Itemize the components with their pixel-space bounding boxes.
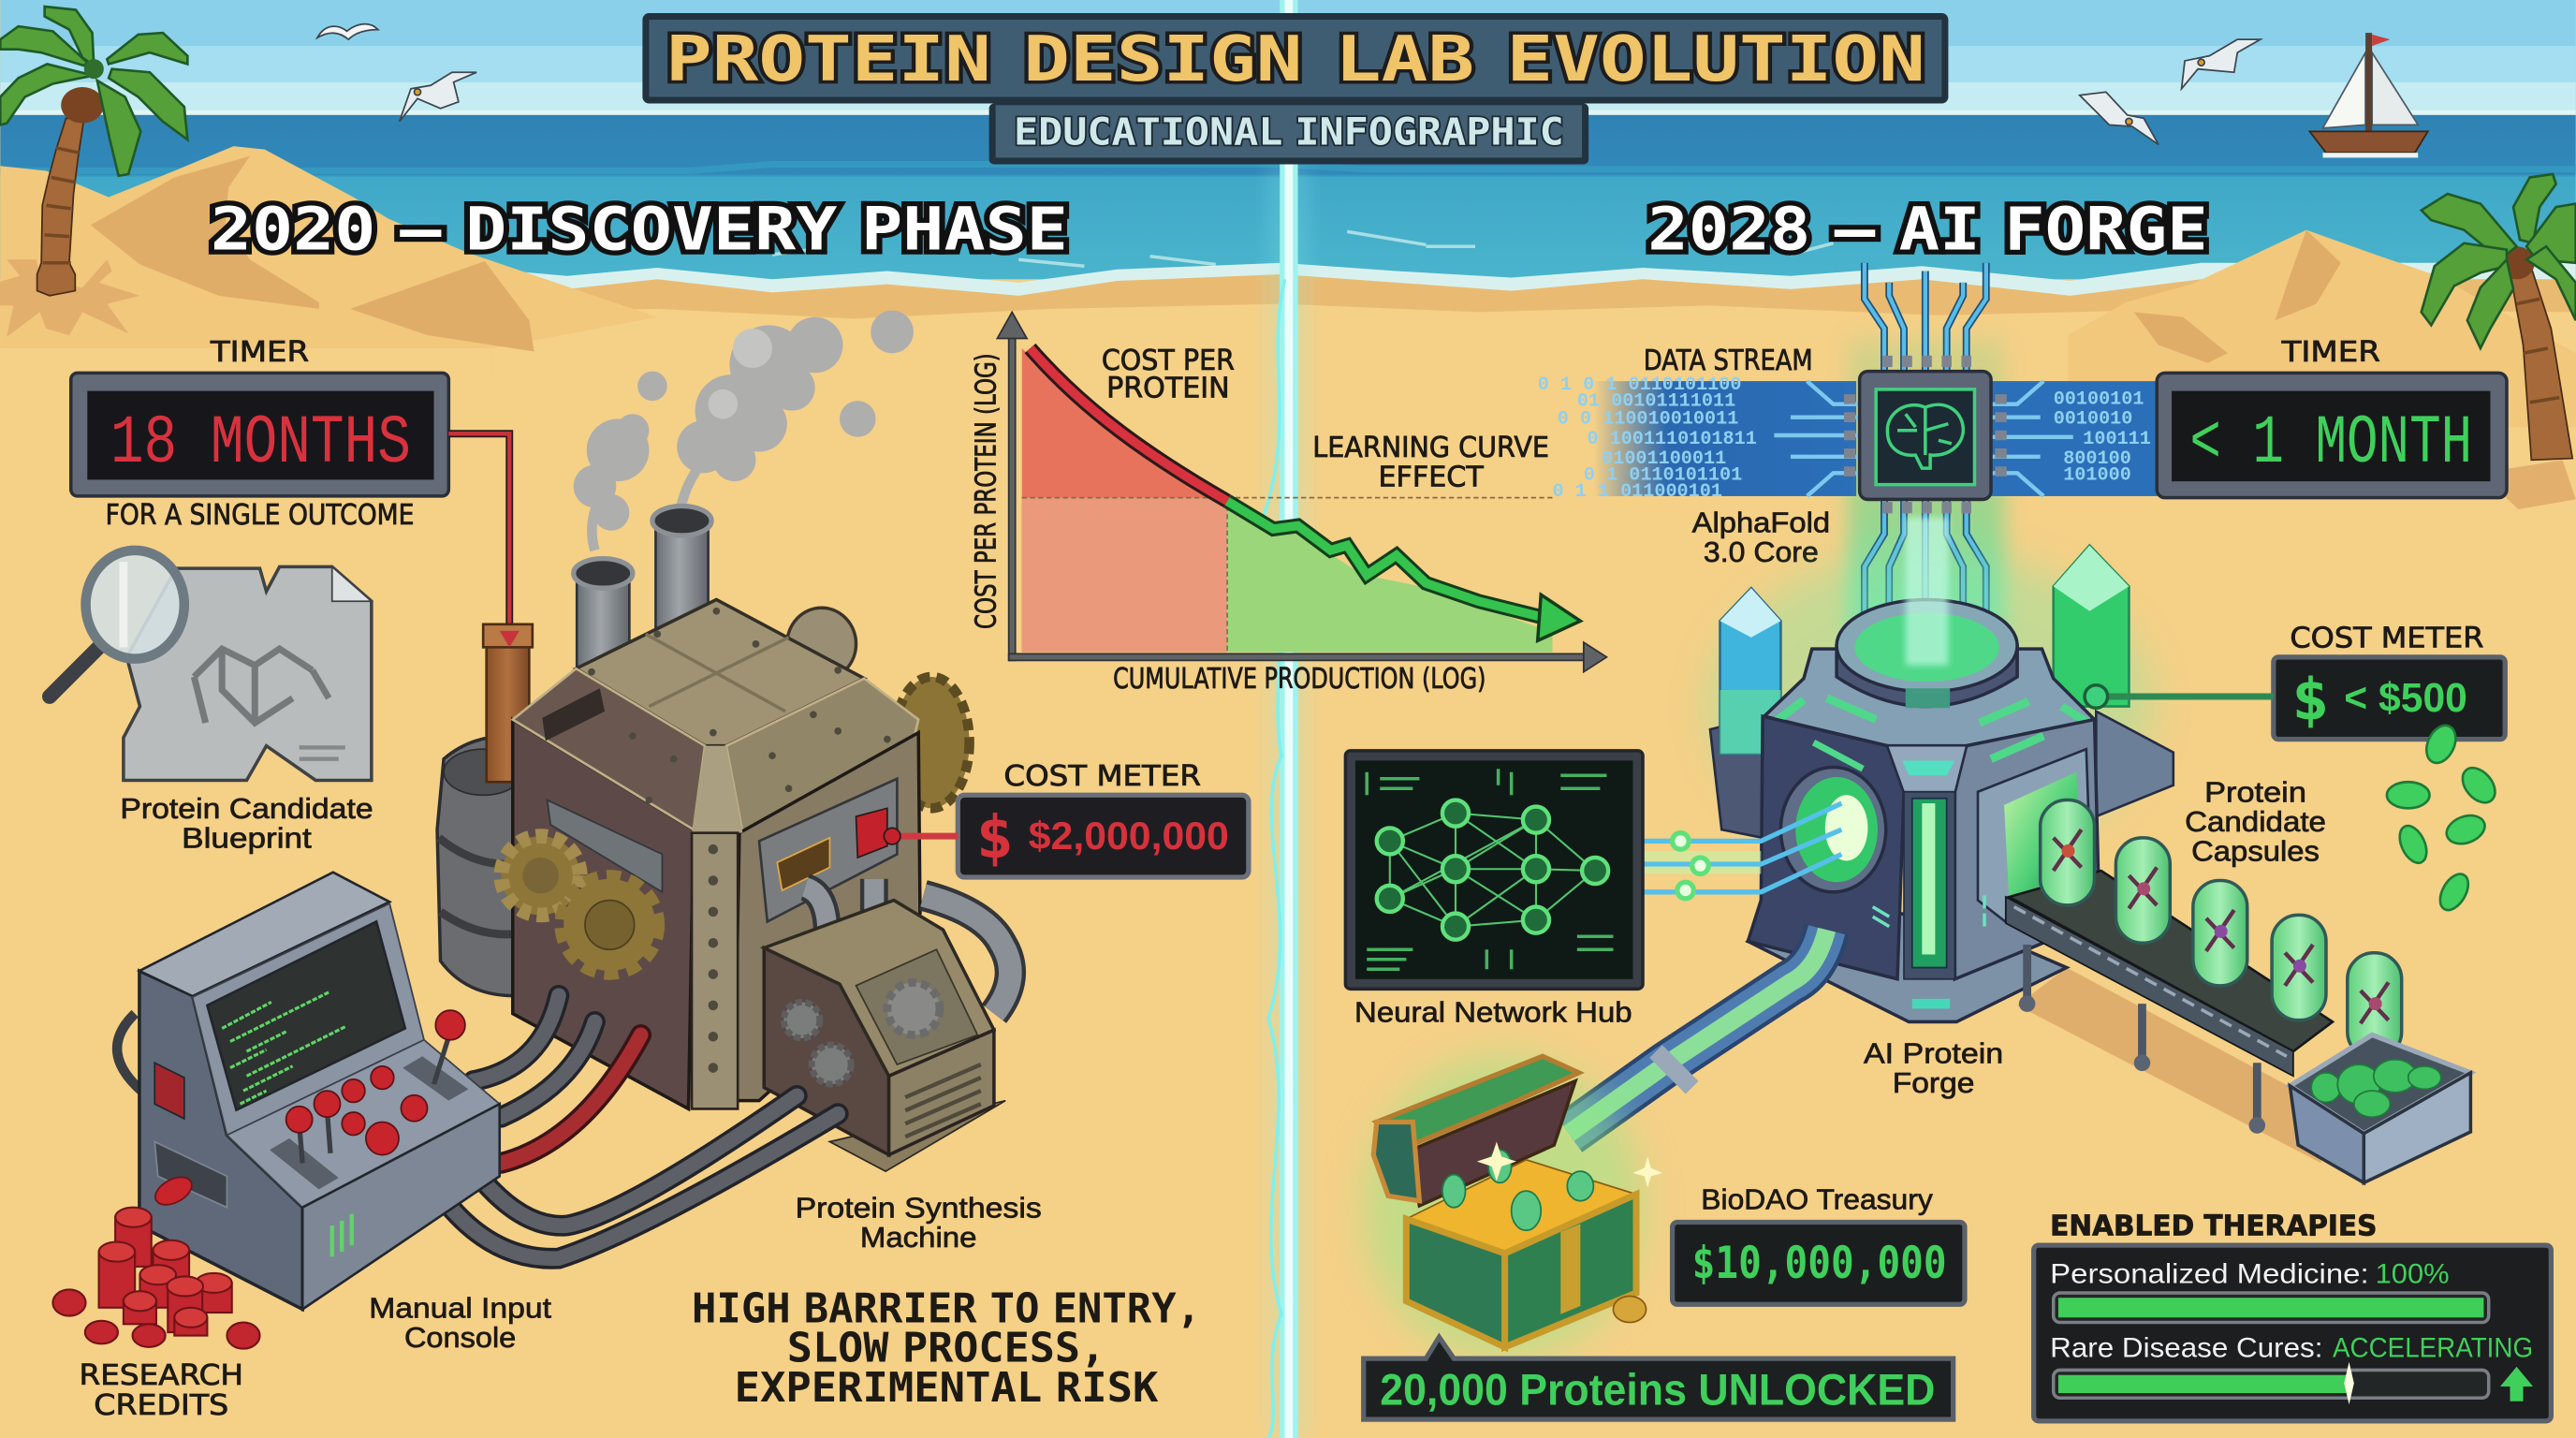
smoke from chimneys (574, 311, 914, 550)
label: AI protein forge (1864, 1036, 2003, 1099)
loose coin (1613, 1296, 1647, 1323)
learning curve chart: PROTEIN (1106, 373, 1230, 405)
chimneys (574, 506, 711, 673)
label: BioDAO treasury: BioDAO Treasury (1701, 1182, 1933, 1215)
cost meter label: COST METER (2290, 622, 2483, 654)
chest body (1406, 1219, 1505, 1347)
neural network hub (1345, 751, 1643, 989)
icon: seagull 1 (317, 24, 378, 39)
cost meter: 2028 (2274, 622, 2505, 740)
data stream label: DATA STREAM (1644, 345, 1813, 377)
chest gold (1406, 1160, 1636, 1254)
callout: high barrier to entry: SLOW PROCESS, (787, 1325, 1105, 1372)
machine left face (513, 720, 694, 1108)
icon: seagull 3 (2080, 92, 2159, 144)
coin slot (154, 1142, 227, 1208)
label: protein candidate capsules: Candidate (2185, 805, 2326, 838)
label: AlphaFold core (1692, 506, 1830, 568)
label: research credits: CREDITS (94, 1389, 228, 1422)
label: protein synthesis machine: Protein Synthesis (796, 1191, 1042, 1224)
forge base (1748, 888, 2067, 1021)
brain icon (1887, 404, 1963, 468)
heading: 2020 discovery phase: 2020 – DISCOVERY PHASE (211, 195, 1068, 264)
rare disease row: Rare Disease Cures: (2050, 1332, 2322, 1363)
heading: enabled therapies: ENABLED THERAPIES (2050, 1211, 2377, 1243)
console bezel (193, 903, 424, 1136)
personalized medicine row: 100% (2376, 1258, 2450, 1289)
forge vents (1873, 895, 1984, 927)
label: protein synthesis machine: Machine (860, 1221, 976, 1254)
label: protein candidate capsules: Capsules (2191, 834, 2320, 867)
arrow up icon (2500, 1367, 2533, 1401)
title text: PROTEIN DESIGN LAB EVOLUTION (666, 22, 1925, 95)
instrument panel (759, 779, 897, 921)
cost meter label: COST METER (1003, 760, 1201, 793)
console screen (207, 921, 405, 1110)
crystal: cyan (1720, 588, 1780, 754)
binary digits: 01 00101111011 (1577, 390, 1735, 412)
learning curve chart: LEARNING CURVE (1312, 432, 1549, 464)
chest lid end (1373, 1122, 1419, 1201)
capsule 2 (2115, 838, 2170, 943)
binary digits: 0 1 1 011000101 (1553, 481, 1722, 503)
network nodes (1377, 800, 1608, 940)
label: protein candidate capsules: Protein (2204, 775, 2306, 808)
sticks (300, 1032, 450, 1163)
binary digits: 0 1 0 1 0110101100 (1538, 374, 1741, 396)
machine right chamfer (726, 679, 918, 833)
label: AlphaFold core: 3.0 Core (1704, 536, 1819, 568)
console left face (139, 971, 302, 1310)
callout: high barrier to entry (692, 1285, 1201, 1412)
subtitle banner (989, 104, 1588, 164)
machine roof (576, 599, 864, 746)
chart labels: COST PER (1102, 345, 1235, 377)
label: AlphaFold core: AlphaFold (1692, 506, 1830, 539)
learning curve chart: CUMULATIVE PRODUCTION (LOG) (1113, 663, 1486, 696)
timer label: TIMER (210, 336, 309, 369)
binary digits: 800100 (2063, 448, 2131, 470)
copper pipe (483, 624, 533, 782)
timer caption: FOR A SINGLE OUTCOME (106, 499, 414, 532)
lower unit top (764, 901, 994, 1076)
callout: high barrier to entry: HIGH BARRIER TO ENTRY, (692, 1285, 1201, 1333)
panel: enabled therapies (2034, 1245, 2551, 1421)
dollar icon: $ (976, 802, 1014, 872)
title banner (642, 13, 1948, 104)
research credit coins (52, 1208, 260, 1349)
timer: 18 months (71, 336, 448, 532)
arrow: timer to machine (448, 433, 509, 624)
cost curve: red (1031, 348, 1227, 501)
machine centre pillar (692, 746, 742, 833)
collection bin (2290, 1034, 2470, 1182)
data stream (1538, 345, 2162, 503)
label: blueprint: Blueprint (182, 821, 312, 854)
back gear (894, 677, 970, 808)
label: AI protein forge: AI Protein (1864, 1036, 2003, 1069)
AlphaFold chip (1850, 361, 2001, 507)
binary digits: 0 1 0110101101 (1584, 464, 1742, 486)
forge roof (1764, 649, 2095, 746)
binary digits: 00100101 (2054, 389, 2144, 411)
label: research credits (80, 1359, 243, 1422)
cost value: < $500 (2344, 675, 2467, 721)
rare disease row (2050, 1332, 2533, 1404)
side switch (154, 1063, 184, 1119)
crystal: green (2054, 546, 2129, 707)
binary digits: 0 0 110010010011 (1558, 409, 1738, 431)
treasury chest (1364, 1056, 1662, 1358)
chart fills (1022, 348, 1553, 653)
icon: right palm tree (2422, 174, 2576, 509)
timer value: 18 MONTHS (110, 405, 411, 483)
protein synthesis machine (437, 506, 1010, 1171)
arrow: cost meter to gauge (884, 828, 958, 844)
timer: under 1 month (2157, 336, 2507, 498)
manual input console (117, 873, 500, 1310)
learning curve chart: COST PER PROTEIN (LOG) (971, 353, 1003, 629)
capsule 5 (2348, 953, 2402, 1058)
rare disease row: ACCELERATING (2333, 1332, 2533, 1363)
barrel (437, 737, 522, 996)
green energy column (1848, 337, 2004, 640)
console top (139, 873, 389, 996)
green porthole (1780, 767, 1886, 892)
central glowing divider (1260, 0, 1308, 1438)
unlocked banner: 20,000 Proteins UNLOCKED (1380, 1365, 1935, 1415)
icon: protein candidate blueprint (50, 550, 372, 780)
unlocked banner (1364, 1337, 1954, 1419)
pillar rivets (588, 608, 891, 1073)
label: blueprint: Protein Candidate (120, 792, 373, 825)
learning curve chart (971, 312, 1606, 696)
console side loop (117, 1014, 143, 1093)
cost curve: green with arrow (1227, 501, 1580, 640)
chest lid top (1377, 1056, 1579, 1145)
capsule 3 (2193, 881, 2247, 986)
conveyor belt (2006, 871, 2333, 1134)
network edges (1390, 814, 1595, 927)
vertical power bar (1904, 792, 1954, 979)
machine right face (735, 733, 920, 1101)
label: manual input console: Console (404, 1321, 516, 1354)
personalized medicine row: Personalized Medicine: (2050, 1258, 2369, 1289)
round dome (787, 608, 856, 680)
lower unit left face (764, 947, 889, 1155)
red buttons (286, 1010, 465, 1155)
forge right face (1954, 720, 2100, 979)
binary digits: 100111 (2083, 429, 2151, 450)
capsule 4 (2272, 915, 2326, 1020)
sparkles (1477, 1142, 1662, 1188)
chart axes (997, 312, 1606, 672)
icon: left palm tree (0, 7, 187, 296)
lower unit right face (889, 1030, 994, 1155)
timer value: < 1 MONTH (2189, 405, 2472, 483)
cost value: $2,000,000 (1029, 814, 1229, 858)
pipes: forge to treasury (1569, 930, 1827, 1134)
treasury value panel: $10,000,000 (1692, 1238, 1947, 1289)
label: neural network hub: Neural Network Hub (1354, 995, 1632, 1028)
binary digits: 101000 (2063, 464, 2131, 486)
console front face (302, 1104, 500, 1310)
binary digits (1538, 374, 2151, 503)
dollar icon: $ (2291, 668, 2329, 734)
AI protein forge (1708, 518, 2321, 1163)
binary digits: 01001100011 (1602, 448, 1726, 470)
cables (444, 995, 838, 1258)
label: manual input console (369, 1291, 552, 1354)
lower unit base (829, 1101, 1005, 1171)
timer label: TIMER (2280, 336, 2380, 369)
label: protein synthesis machine (796, 1191, 1042, 1254)
glow (1708, 550, 2152, 862)
icon: seagull 4 (2182, 39, 2261, 89)
palm shadow on sand (0, 259, 139, 337)
red gauge (856, 808, 887, 858)
pipes (805, 879, 1010, 1014)
protein capsules (2041, 800, 2402, 1058)
label: blueprint (120, 792, 373, 854)
reactor ring (1837, 518, 2017, 708)
circuit traces to forge (1865, 263, 1986, 624)
cost meter: 2020 (958, 760, 1249, 877)
sand dune: right (2068, 230, 2576, 427)
callout: high barrier to entry: EXPERIMENTAL RISK (735, 1364, 1159, 1412)
binary digits: 0010010 (2054, 409, 2132, 431)
label: manual input console: Manual Input (369, 1291, 552, 1324)
binary digits: 0 1001110101811 (1587, 429, 1757, 450)
side tubes (1710, 716, 1763, 838)
forge left face (1748, 716, 1904, 979)
treasury value panel (1673, 1223, 1965, 1304)
connector: cost meter to forge (2085, 685, 2274, 708)
heading: 2028 AI forge: 2028 – AI FORGE (1647, 195, 2208, 264)
label: protein candidate capsules (2185, 775, 2326, 867)
console control deck (227, 1040, 500, 1208)
conveyor shadow (2017, 968, 2321, 1163)
machine left chamfer (513, 668, 705, 829)
forge centre top (1887, 746, 1967, 792)
label: AI protein forge: Forge (1893, 1066, 1974, 1099)
sand dune: left (0, 146, 657, 348)
exit door (1978, 749, 2093, 936)
capsule 1 (2041, 800, 2095, 905)
learning curve chart: EFFECT (1379, 461, 1485, 493)
magnifier (50, 550, 184, 697)
beams: neural hub to forge (1643, 803, 1841, 899)
chest lid interior (1412, 1081, 1575, 1206)
subtitle text: EDUCATIONAL INFOGRAPHIC (1014, 110, 1564, 154)
icon: seagull 2 (400, 72, 476, 122)
gears (501, 836, 655, 971)
label: research credits: RESEARCH (80, 1359, 243, 1392)
icon: sailboat (2309, 33, 2428, 157)
personalized medicine row (2050, 1258, 2489, 1323)
falling protein pills (2387, 721, 2501, 915)
